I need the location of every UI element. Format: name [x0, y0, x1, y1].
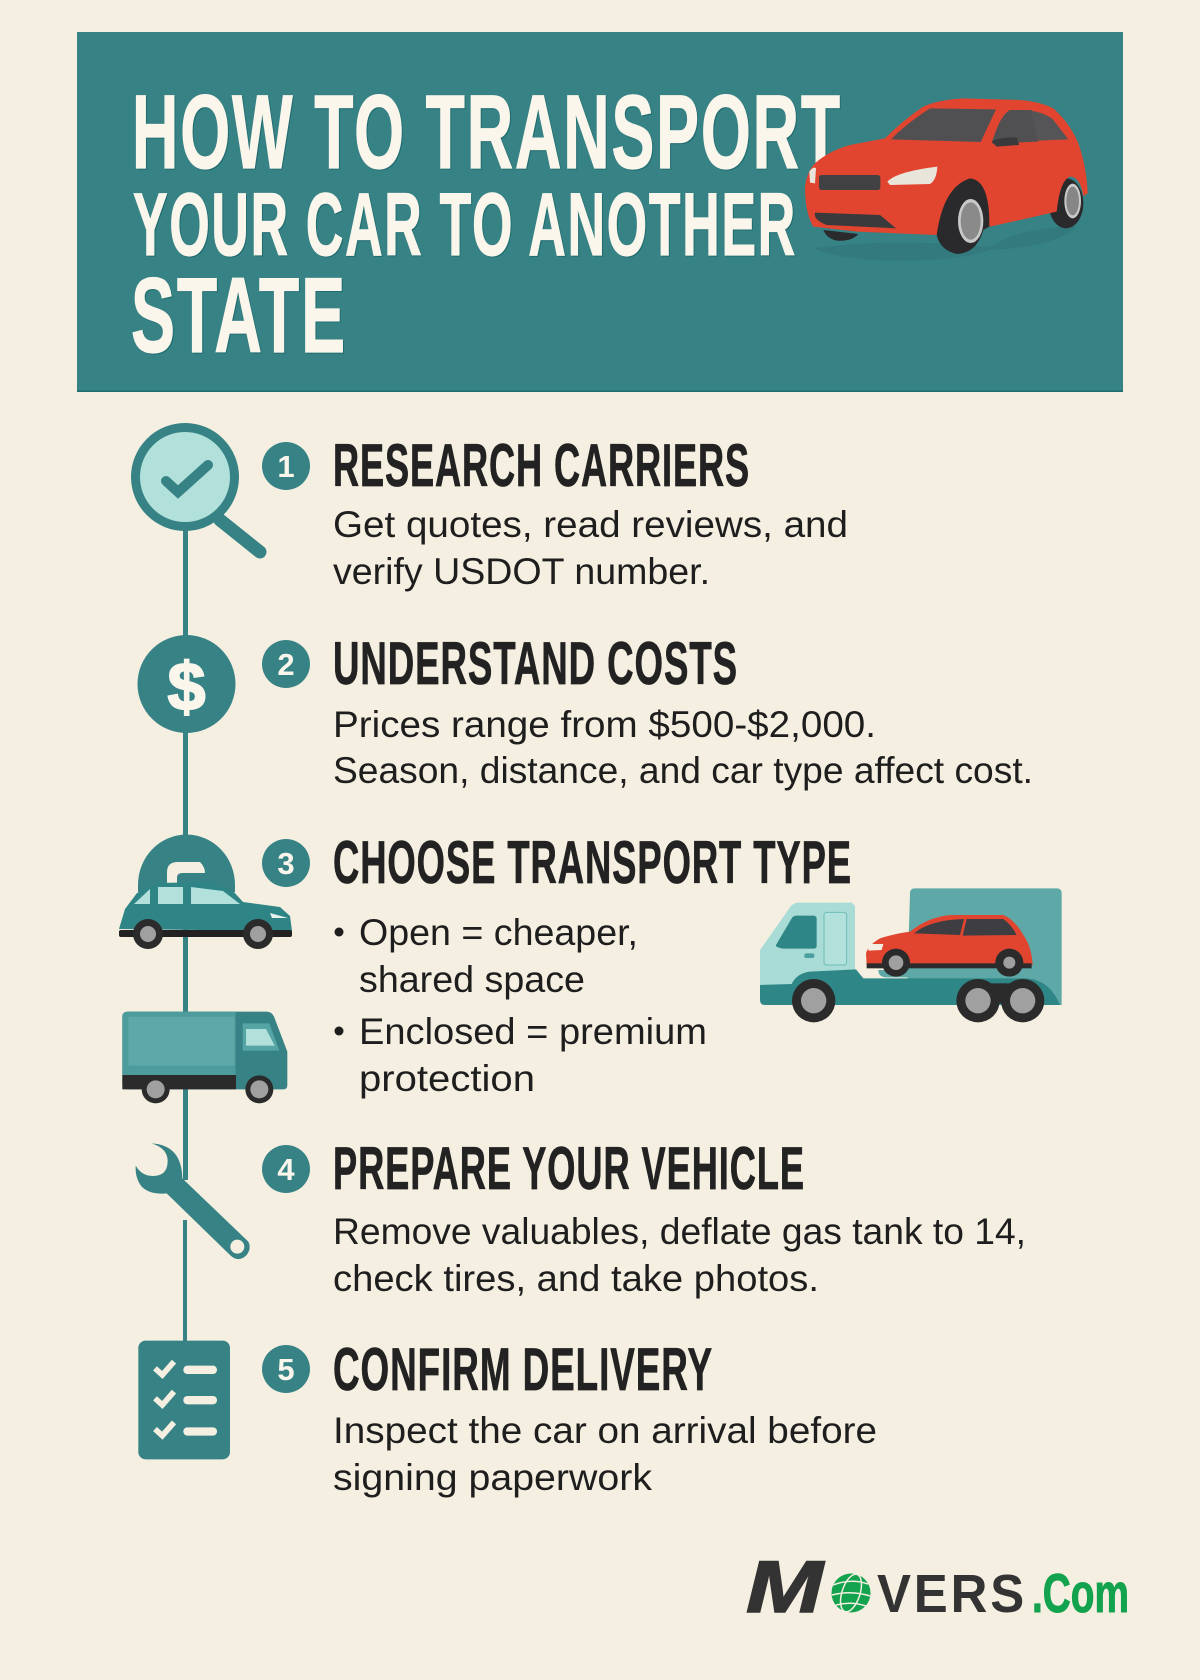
bullets: [334, 912, 707, 1099]
logo: Movers.com: VERS: [877, 1564, 1027, 1624]
heading 2: UNDERSTAND COSTS: [333, 630, 738, 697]
number badge 1: [262, 442, 310, 490]
icon: magnifier with check: [136, 428, 260, 552]
step 1: [262, 432, 848, 592]
timeline line: [183, 520, 188, 1345]
body 1: Get quotes, read reviews, and: [333, 504, 848, 545]
bullets: protection: [359, 1058, 535, 1099]
title: [131, 74, 842, 375]
body 2: [333, 704, 1033, 791]
step 2: [262, 630, 1033, 791]
icon: enclosed truck: [122, 1012, 287, 1103]
body 2: Season, distance, and car type affect cost.: [333, 750, 1033, 791]
icon: wrench: [136, 1143, 250, 1259]
title: STATE: [131, 255, 347, 375]
bullets: Enclosed = premium: [359, 1011, 707, 1052]
number badge 3: [262, 839, 310, 887]
number badge 4: [262, 1145, 310, 1193]
heading 3: CHOOSE TRANSPORT TYPE: [333, 829, 852, 896]
body 5: [333, 1410, 877, 1498]
number badge 5: 5: [277, 1352, 295, 1387]
number badge 4: 4: [277, 1152, 295, 1187]
icon: checklist: [138, 1341, 230, 1459]
body 1: verify USDOT number.: [333, 551, 710, 592]
step 5: [262, 1336, 877, 1498]
heading 5: CONFIRM DELIVERY: [333, 1336, 713, 1403]
body 5: signing paperwork: [333, 1457, 653, 1498]
body 4: Remove valuables, deflate gas tank to 14,: [333, 1211, 1026, 1252]
bullets: Open = cheaper,: [359, 912, 638, 953]
step 4: [262, 1135, 1026, 1299]
body 2: Prices range from $500-$2,000.: [333, 704, 876, 745]
logo: Movers.com: .Com: [1032, 1562, 1129, 1624]
logo: Movers.com: [746, 1547, 1129, 1628]
number badge 2: [262, 640, 310, 688]
icon: dollar coin: $: [168, 649, 205, 725]
body 4: [333, 1211, 1026, 1299]
header banner: [77, 32, 1123, 392]
icon: green globe: [832, 1572, 870, 1614]
heading 1: RESEARCH CARRIERS: [333, 432, 750, 499]
step 3: [262, 829, 852, 1099]
number badge 2: 2: [277, 647, 295, 682]
icon: red car: [805, 98, 1088, 261]
number badge 1: 1: [277, 449, 295, 484]
illustration: tow truck with red car: [760, 888, 1062, 1022]
bullets: shared space: [359, 959, 585, 1000]
body 1: [333, 504, 848, 592]
icon: dollar coin: [138, 635, 236, 733]
number badge 3: 3: [277, 846, 295, 881]
logo: Movers.com: M: [746, 1547, 826, 1628]
number badge 5: [262, 1345, 310, 1393]
body 5: Inspect the car on arrival before: [333, 1410, 877, 1451]
heading 4: PREPARE YOUR VEHICLE: [333, 1135, 805, 1202]
icon: open transport car: [119, 834, 292, 949]
body 4: check tires, and take photos.: [333, 1258, 819, 1299]
